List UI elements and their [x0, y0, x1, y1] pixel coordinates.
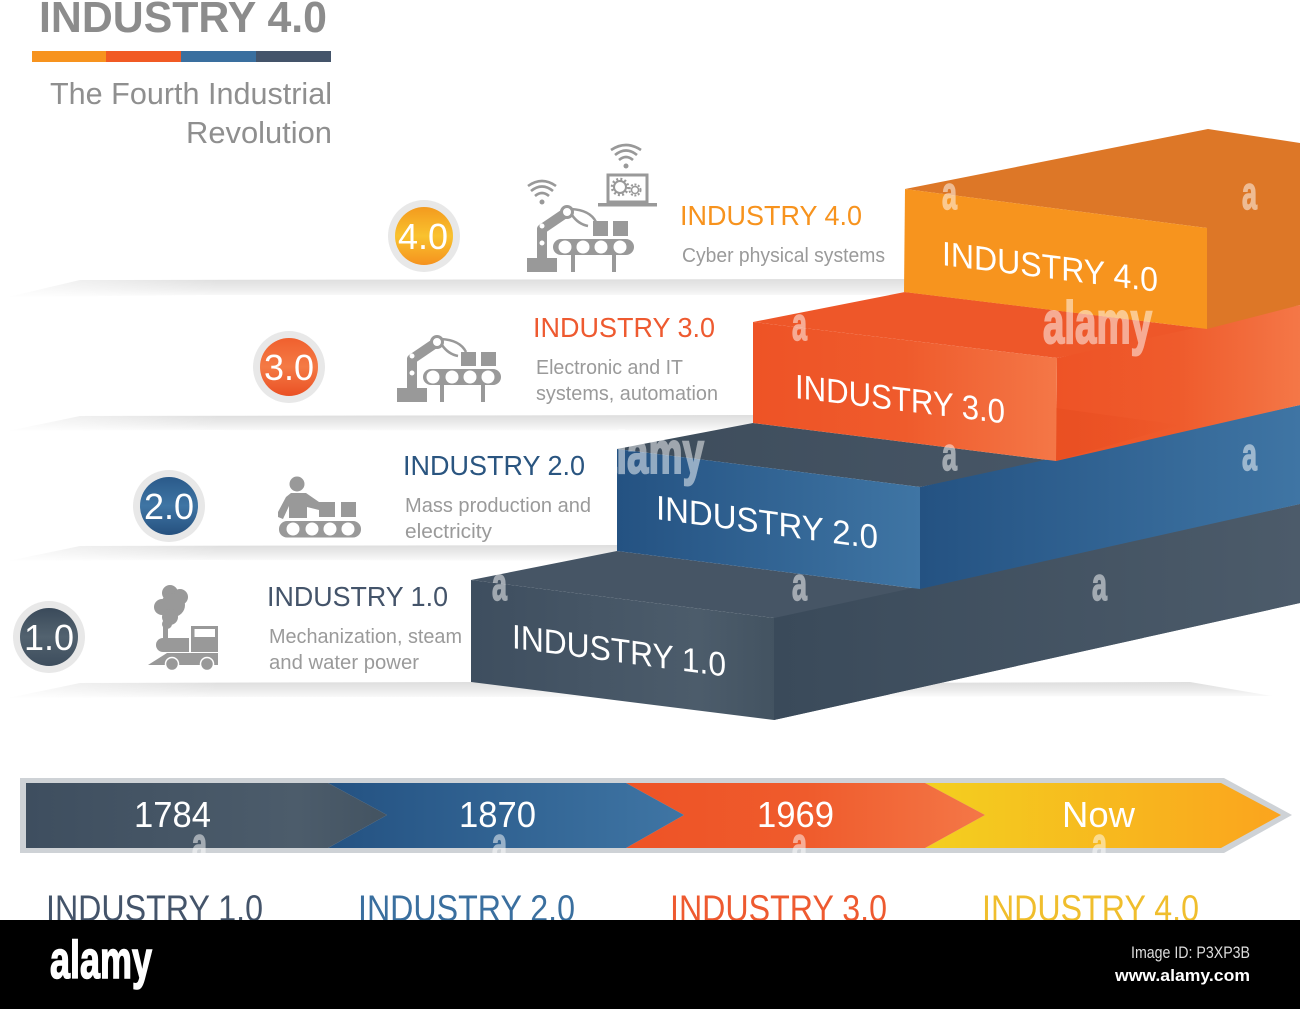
footer bar — [0, 920, 1300, 1009]
badge 4.0 — [388, 200, 460, 272]
segment: 1784 — [26, 783, 387, 848]
step: industry 2.0 — [617, 405, 1300, 589]
timeline labels: INDUSTRY 4.0 — [982, 888, 1199, 929]
image id: Image ID: P3XP3B — [1131, 943, 1250, 962]
timeline labels: INDUSTRY 3.0 — [670, 888, 887, 929]
badge 4.0: 4.0 — [398, 216, 448, 257]
footer logo: alamy — [50, 931, 152, 990]
step: industry 4.0: INDUSTRY 4.0 — [942, 235, 1158, 300]
watermarks: a — [1092, 818, 1107, 870]
description 3.0: Electronic and IT — [536, 357, 683, 379]
icon: connected robot arm and laptop — [527, 145, 657, 272]
description 3.0: systems, automation — [536, 383, 718, 405]
watermarks — [192, 167, 1257, 870]
colour bar — [32, 51, 331, 62]
label 1.0: INDUSTRY 1.0 — [267, 581, 448, 612]
panel: staircase — [471, 129, 1300, 720]
website: www.alamy.com — [1114, 966, 1250, 985]
badge 1.0 — [13, 601, 85, 673]
timeline arrow — [20, 778, 1292, 853]
description 2.0: Mass production and — [405, 495, 591, 517]
watermarks: a — [942, 167, 957, 219]
timeline years: 1784 — [134, 794, 211, 835]
subtitle: The Fourth Industrial — [50, 76, 332, 111]
badge 3.0: 3.0 — [264, 347, 314, 388]
watermarks: a — [792, 818, 807, 870]
description 4.0: Cyber physical systems — [682, 245, 885, 267]
description 1.0: Mechanization, steam — [269, 626, 462, 648]
watermarks: alamy — [595, 420, 704, 486]
step: industry 1.0: INDUSTRY 1.0 — [512, 618, 726, 685]
step: industry 1.0 — [471, 504, 1300, 720]
row: industry 3.0 — [253, 312, 718, 405]
title block — [32, 0, 332, 150]
watermarks: a — [1092, 558, 1107, 610]
step: industry 3.0: INDUSTRY 3.0 — [795, 368, 1005, 431]
timeline labels: INDUSTRY 2.0 — [358, 888, 575, 929]
subtitle — [50, 76, 332, 150]
step: industry 4.0 — [904, 129, 1300, 329]
description 1.0: and water power — [269, 652, 419, 674]
badge 3.0 — [253, 331, 325, 403]
icon: robot arm and conveyor — [397, 336, 501, 402]
description 1.0 — [269, 626, 462, 674]
row: industry 1.0 — [13, 581, 462, 674]
badge 2.0 — [133, 470, 205, 542]
shelf shadows — [0, 278, 1272, 701]
timeline years: 1870 — [459, 794, 536, 835]
watermarks: a — [942, 428, 957, 480]
label 4.0: INDUSTRY 4.0 — [680, 200, 862, 231]
label 2.0: INDUSTRY 2.0 — [403, 450, 585, 481]
watermarks: a — [492, 818, 507, 870]
icon: worker at conveyor — [278, 476, 361, 538]
timeline labels: INDUSTRY 1.0 — [46, 888, 263, 929]
watermarks: a — [1242, 167, 1257, 219]
timeline labels — [46, 888, 1199, 929]
badge 1.0: 1.0 — [24, 617, 74, 658]
badge 2.0: 2.0 — [144, 486, 194, 527]
label 3.0: INDUSTRY 3.0 — [533, 312, 715, 343]
segment: 1969 — [626, 783, 985, 848]
description 2.0: electricity — [405, 521, 492, 543]
watermarks: a — [492, 558, 507, 610]
watermarks: a — [792, 558, 807, 610]
watermarks: a — [1242, 428, 1257, 480]
subtitle: Revolution — [186, 115, 332, 150]
watermarks: a — [192, 818, 207, 870]
timeline years: 1969 — [757, 794, 834, 835]
row: industry 4.0 — [388, 145, 885, 272]
watermarks: alamy — [1043, 290, 1152, 356]
icon: steam locomotive — [148, 585, 218, 670]
step: industry 3.0 — [753, 292, 1300, 461]
row: industry 2.0 — [133, 450, 591, 543]
step: industry 2.0: INDUSTRY 2.0 — [656, 489, 878, 557]
description 3.0 — [536, 357, 718, 405]
segment: now — [925, 783, 1281, 848]
segment: 1870 — [328, 783, 684, 848]
timeline years: Now — [1062, 794, 1136, 835]
timeline years — [134, 794, 1136, 835]
description 2.0 — [405, 495, 591, 543]
watermarks: a — [792, 298, 807, 350]
